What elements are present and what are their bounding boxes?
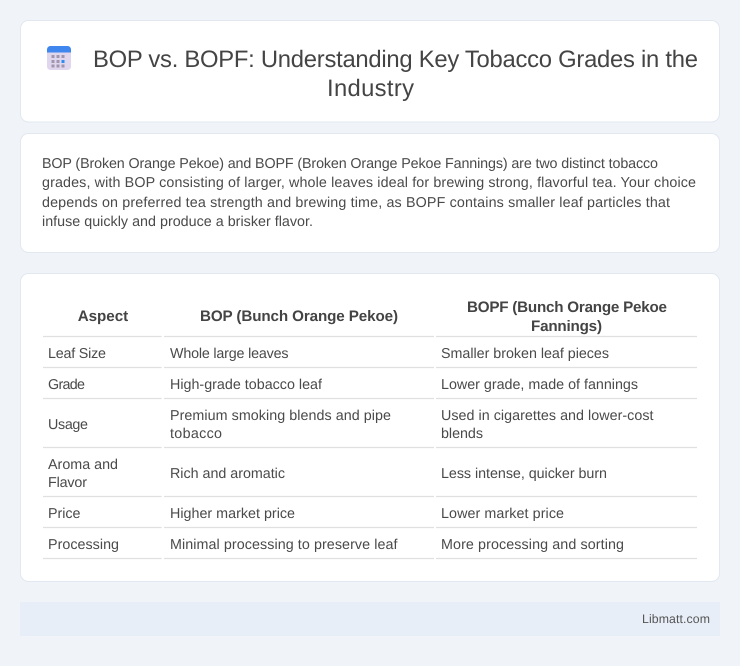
- table header: [78, 299, 667, 335]
- table header: BOPF (Bunch Orange Pekoe: [467, 299, 667, 316]
- intro paragraph: depends on preferred tea strength and brewing time, as BOPF contains smaller leaf particles that: [42, 195, 670, 211]
- intro paragraph: infuse quickly and produce a brisker flavor.: [42, 214, 313, 230]
- row: processing: Minimal processing to preserve leaf: [170, 537, 398, 553]
- panel: title card: [20, 20, 720, 122]
- row: processing: [48, 537, 624, 553]
- row: grade: [48, 377, 638, 393]
- row: leaf size: [48, 346, 609, 362]
- row: grade: High-grade tobacco leaf: [170, 377, 322, 393]
- row: grade: Lower grade, made of fannings: [441, 377, 638, 393]
- row: processing: More processing and sorting: [441, 537, 624, 553]
- title: BOP vs. BOPF: Understanding Key Tobacco Grades in the: [93, 46, 698, 73]
- intro paragraph: [42, 156, 696, 230]
- row: usage: tobacco: [170, 426, 222, 442]
- row: usage: Premium smoking blends and pipe: [170, 408, 391, 424]
- row: aroma and flavor: Flavor: [48, 475, 87, 491]
- row: grade: Grade: [48, 377, 85, 393]
- row: price: Lower market price: [441, 506, 564, 522]
- row: aroma and flavor: Rich and aromatic: [170, 466, 285, 482]
- panel: intro text: [20, 134, 720, 252]
- row: usage: Usage: [48, 417, 88, 433]
- row: leaf size: Whole large leaves: [170, 346, 288, 362]
- panel: comparison table: [20, 274, 720, 582]
- row: price: Higher market price: [170, 506, 295, 522]
- intro paragraph: BOP (Broken Orange Pekoe) and BOPF (Broken Orange Pekoe Fannings) are two distinct tobacco: [42, 156, 658, 172]
- row: price: Price: [48, 506, 81, 522]
- intro paragraph: grades, with BOP consisting of larger, whole leaves ideal for brewing strong, flavorful tea. Your choice: [42, 175, 696, 191]
- row: leaf size: Smaller broken leaf pieces: [441, 346, 609, 362]
- row: aroma and flavor: Aroma and: [48, 457, 118, 473]
- row: usage: blends: [441, 426, 483, 442]
- footer credit: Libmatt.com: [642, 612, 710, 626]
- row: leaf size: Leaf Size: [48, 346, 106, 362]
- row: usage: [48, 408, 654, 442]
- icon: calendar: [47, 46, 71, 70]
- table header: Aspect: [78, 308, 128, 325]
- table header: BOP (Bunch Orange Pekoe): [200, 308, 398, 325]
- title: Industry: [327, 75, 414, 102]
- footer bar: [20, 602, 720, 636]
- row: usage: Used in cigarettes and lower-cost: [441, 408, 654, 424]
- title: [93, 46, 698, 102]
- row: processing: Processing: [48, 537, 119, 553]
- row: aroma and flavor: [48, 457, 607, 491]
- table header: Fannings): [531, 318, 602, 335]
- row: aroma and flavor: Less intense, quicker burn: [441, 466, 607, 482]
- row: price: [48, 506, 564, 522]
